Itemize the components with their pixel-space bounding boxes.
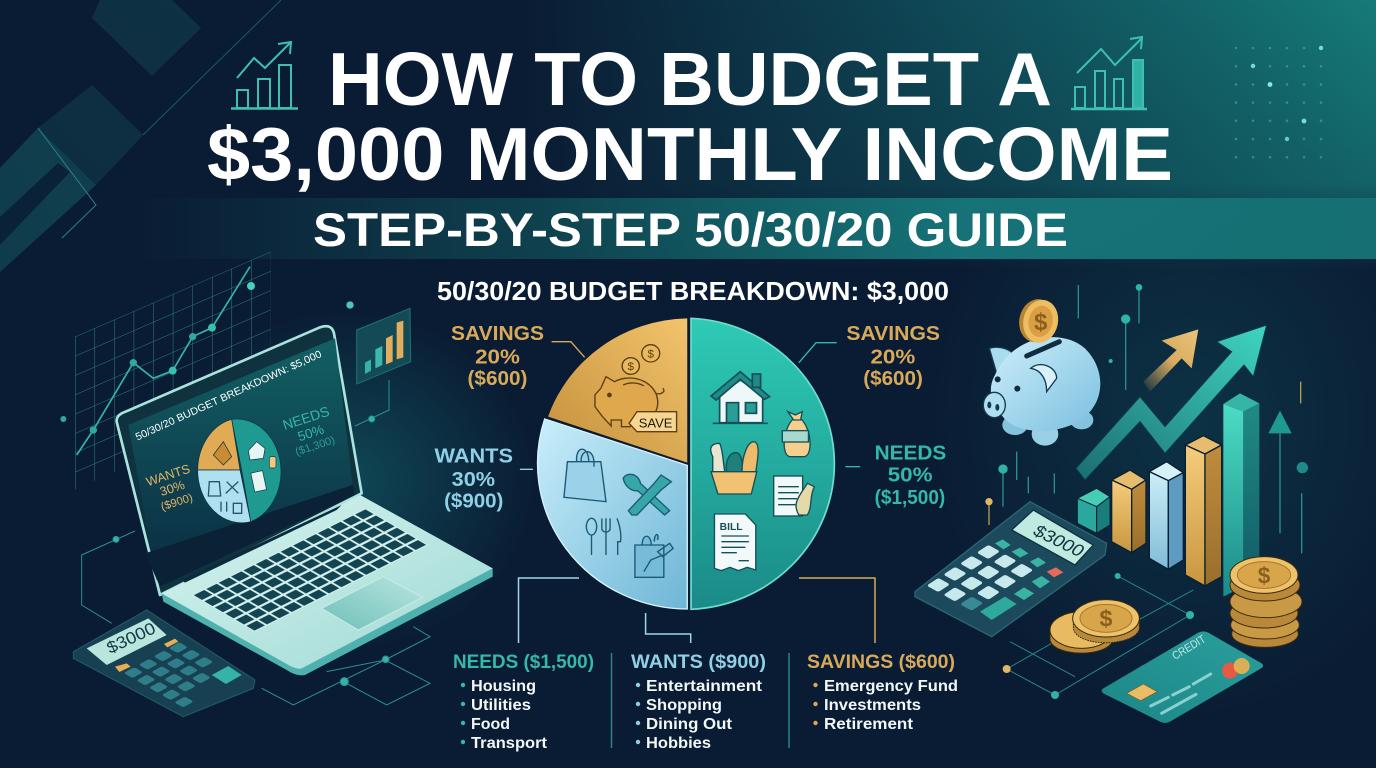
list: wants: Dining Out: [646, 716, 733, 733]
list: wants: WANTS ($900): [631, 652, 766, 673]
dot grid decoration: [1228, 39, 1330, 167]
pie slice: wants: [538, 419, 687, 609]
connector: wants list: [646, 613, 691, 643]
label: needs: [875, 442, 946, 509]
icon: piggy bank: [595, 345, 664, 427]
laptop illustration: [60, 252, 493, 717]
coin on piggy: $: [1034, 309, 1047, 336]
calculator right: $3000: [1029, 521, 1089, 560]
icon: piggy bank: $: [647, 348, 655, 360]
laptop screen text: 50/30/20 BUDGET BREAKDOWN: $5,000: [134, 349, 324, 443]
list: wants: [631, 652, 766, 752]
bar column tallest teal: [1223, 393, 1259, 597]
trackpad: [322, 577, 423, 630]
icon: grocery basket: [711, 442, 758, 494]
subtitle: STEP-BY-STEP 50/30/20 GUIDE: [313, 203, 1068, 256]
credit card: CREDIT: [1170, 633, 1208, 663]
label: savings right: 20%: [870, 346, 916, 368]
label: savings right: ($600): [863, 367, 923, 390]
bar column teal small: [1077, 488, 1110, 533]
laptop mini pie: [198, 419, 281, 523]
connector lines: [60, 301, 430, 705]
list: needs: Food: [471, 716, 510, 733]
icon: save tag: SAVE: [639, 416, 672, 431]
right finance illustration: [915, 284, 1308, 723]
list: wants: Entertainment: [646, 678, 763, 695]
list: savings: SAVINGS ($600): [807, 652, 955, 673]
icon: receipt note: [774, 476, 814, 516]
laptop wants label: ($900): [160, 492, 195, 513]
calculator right: [915, 502, 1107, 637]
decorative geometric shapes: [0, 0, 281, 272]
list: savings: Emergency Fund: [824, 678, 958, 695]
icon: bill: [714, 514, 756, 571]
label: savings right: SAVINGS: [846, 322, 940, 345]
accent lines and dots: [985, 284, 1308, 553]
laptop screen: [117, 326, 362, 595]
list: savings: Retirement: [824, 716, 914, 733]
icon: shopping bag: [564, 449, 606, 502]
list: wants: Hobbies: [646, 735, 711, 752]
coin stack: $: [1258, 562, 1271, 588]
icon: cutlery: [586, 518, 621, 555]
list: needs: NEEDS ($1,500): [453, 652, 594, 673]
label: wants: ($900): [444, 490, 503, 512]
connector: savings list: [799, 578, 875, 643]
connector: needs list: [518, 578, 579, 643]
icon: gift bag: [635, 535, 673, 577]
connector: needs: [845, 465, 860, 469]
icon: sack: [782, 412, 810, 457]
icon: title chart right: [1071, 37, 1147, 109]
subtitle band: [0, 198, 1376, 259]
label: needs: 50%: [888, 464, 933, 487]
label: needs: ($1,500): [875, 486, 945, 509]
divider: [610, 653, 612, 748]
calculator left: [73, 610, 255, 717]
connector: wants: [520, 467, 533, 471]
list: needs: Utilities: [471, 697, 531, 714]
growth arrow gold: [1143, 329, 1198, 392]
laptop wants label: [144, 462, 200, 515]
laptop needs label: NEEDS: [281, 403, 331, 433]
icon: title chart left: [231, 42, 298, 108]
connector: savings right: [799, 343, 837, 363]
list: wants: Shopping: [646, 697, 722, 714]
label: needs: NEEDS: [875, 442, 946, 464]
bar column tall gold: [1185, 436, 1222, 586]
label: wants: 30%: [452, 468, 495, 491]
list: needs: [453, 652, 594, 752]
label: savings left: [451, 322, 544, 390]
label: savings left: SAVINGS: [451, 322, 544, 345]
label: wants: [434, 445, 513, 512]
icon: bill: BILL: [720, 522, 743, 533]
connector: savings left: [552, 342, 585, 357]
credit card: [1102, 631, 1263, 723]
list: needs: Housing: [471, 678, 536, 695]
label: savings right: [846, 322, 940, 390]
laptop base: [162, 495, 493, 675]
laptop needs label: ($1,300): [294, 434, 337, 458]
title: HOW TO BUDGET A: [328, 37, 1052, 121]
title: $3,000 MONTHLY INCOME: [207, 112, 1173, 196]
background line chart: [75, 252, 271, 490]
label: savings left: ($600): [468, 367, 527, 390]
list: savings: Investments: [824, 697, 921, 714]
icon: house: [711, 372, 770, 423]
label: wants: WANTS: [434, 445, 513, 468]
laptop needs label: [281, 403, 340, 460]
laptop needs label: 50%: [296, 422, 326, 444]
icon: save tag: [629, 412, 677, 432]
piggy bank: [983, 337, 1100, 446]
keyboard: [192, 508, 428, 632]
icon: piggy bank: $: [628, 361, 635, 373]
coin on piggy: [1015, 296, 1062, 346]
chart heading: 50/30/20 BUDGET BREAKDOWN: $3,000: [437, 276, 949, 306]
two gold coins: $: [1100, 606, 1113, 632]
title: [207, 37, 1173, 196]
pie chart section: [434, 318, 946, 609]
growth arrow teal: [1076, 325, 1267, 480]
pie slice: needs: [691, 318, 834, 609]
coin stack: [1230, 557, 1302, 647]
divider: [788, 653, 790, 748]
mini bar panel: [357, 308, 411, 384]
list: needs: Transport: [471, 735, 548, 752]
pie slice: savings: [548, 318, 687, 463]
label: savings left: 20%: [475, 346, 520, 368]
icon: spoon and fork: [623, 474, 671, 515]
laptop wants label: 30%: [158, 478, 187, 499]
laptop wants label: WANTS: [144, 462, 192, 489]
two gold coins: [1050, 600, 1139, 653]
bar column light blue: [1149, 462, 1183, 569]
calculator left: $3000: [104, 619, 159, 658]
floor connector lines: [1003, 573, 1194, 699]
bar column gold: [1112, 470, 1146, 553]
list: savings: [807, 652, 958, 733]
